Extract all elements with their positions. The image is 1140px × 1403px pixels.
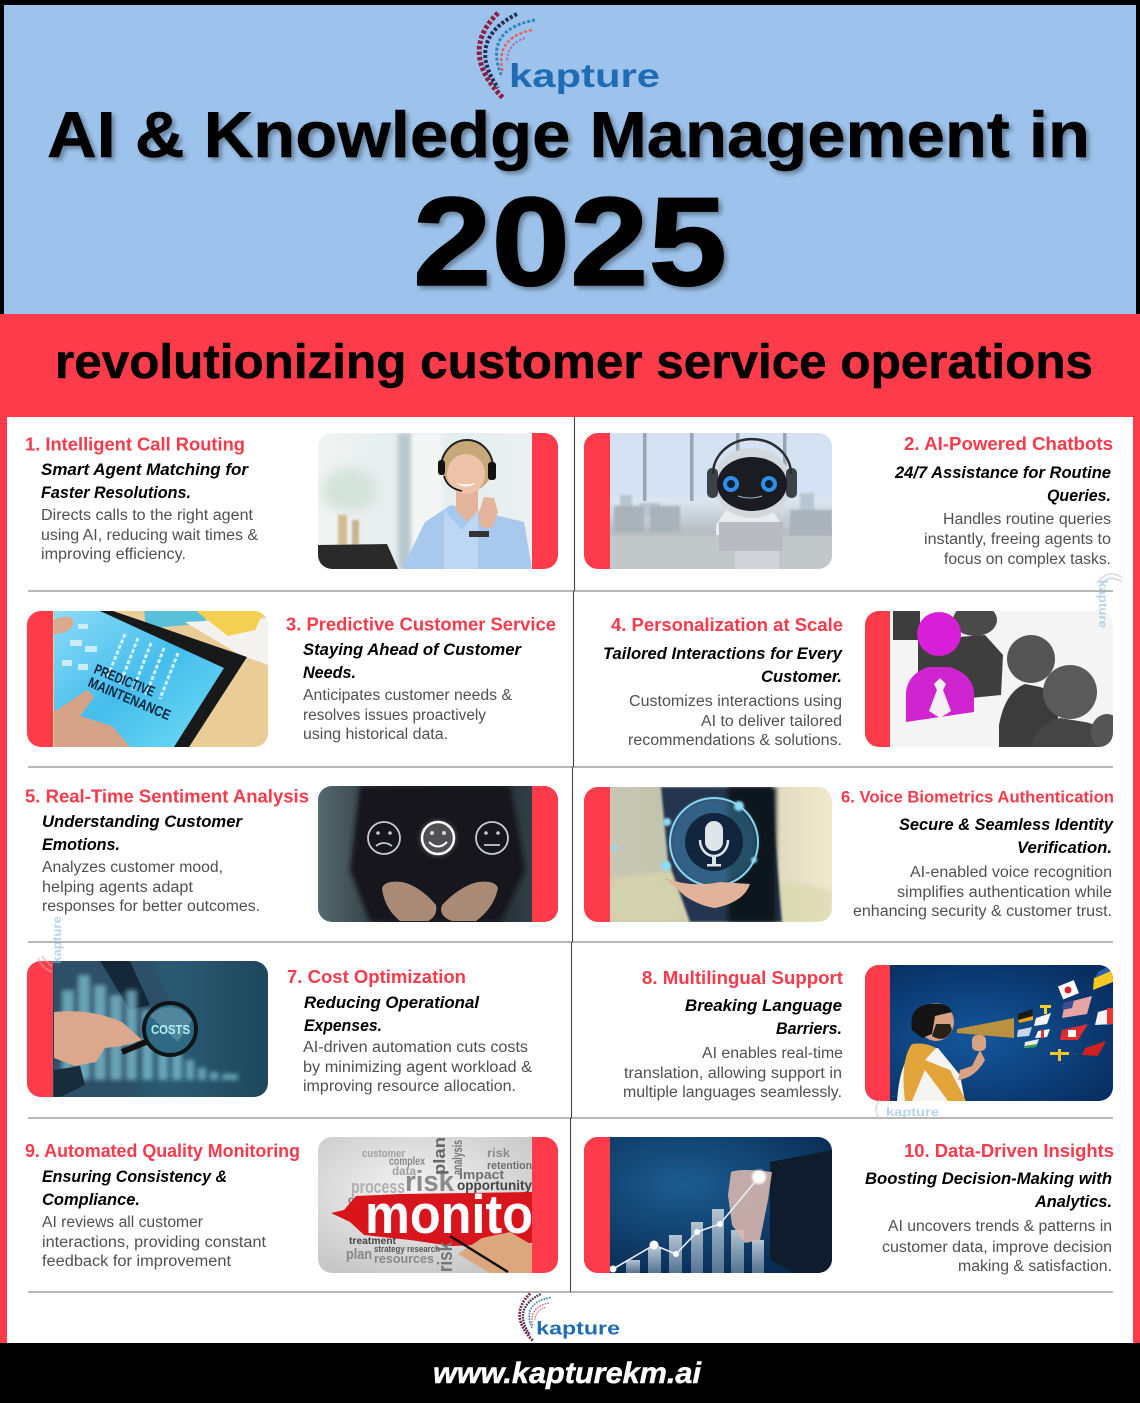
- body 3: using historical data.: [303, 726, 448, 743]
- image: magenta figure among grey figures: [865, 611, 1113, 747]
- panel 9: automated quality monitoring: [25, 1137, 558, 1273]
- subheading 6: Secure & Seamless Identity: [899, 816, 1114, 834]
- body 9: feedback for improvement: [42, 1253, 232, 1270]
- image: monitor word cloud: risk: [405, 1166, 455, 1198]
- body 7: by minimizing agent workload &: [303, 1059, 533, 1076]
- body 4: recommendations & solutions.: [628, 732, 842, 749]
- body 8: multiple languages seamlessly.: [623, 1084, 842, 1101]
- subheading 1: Smart Agent Matching for: [41, 461, 250, 479]
- image: rising bar chart with hand: [584, 1137, 832, 1273]
- body 3: [303, 687, 513, 743]
- heading 8: 8. Multilingual Support: [642, 967, 843, 988]
- footer band: [0, 1343, 1140, 1403]
- image: tablet with predictive maintenance: [27, 603, 268, 747]
- subheading 1: [41, 461, 250, 502]
- body 6: AI-enabled voice recognition: [910, 864, 1112, 881]
- body 5: Analyzes customer mood,: [42, 859, 223, 876]
- subheading 1: Faster Resolutions.: [41, 484, 191, 502]
- subheading 10: Boosting Decision-Making with: [865, 1170, 1112, 1188]
- image: voice microphone hologram: [584, 787, 832, 922]
- logo: kapture: kapture: [509, 57, 660, 94]
- subheading 7: [304, 994, 479, 1035]
- heading 6: 6. Voice Biometrics Authentication: [841, 788, 1114, 806]
- subheading 5: Understanding Customer: [42, 813, 244, 831]
- subheading 2: [894, 464, 1111, 505]
- body 8: [623, 1045, 843, 1101]
- image: call centre agent: [318, 433, 558, 569]
- image: monitor word cloud: cost: [348, 1193, 372, 1207]
- heading 3: 3. Predictive Customer Service: [286, 614, 556, 634]
- header panel: [0, 0, 1140, 314]
- body 9: [42, 1214, 267, 1270]
- body 8: translation, allowing support in: [624, 1065, 842, 1082]
- panel 3: predictive customer service: [27, 603, 556, 747]
- image: monitor word cloud: analysis: [449, 1140, 465, 1175]
- subheading 4: Customer.: [761, 668, 842, 686]
- year 2025: 2025: [413, 171, 727, 312]
- body 1: using AI, reducing wait times &: [41, 527, 259, 544]
- body 10: making & satisfaction.: [958, 1258, 1112, 1275]
- image: tablet with predictive maintenance: PREDICTIVE: [92, 662, 157, 701]
- body 2: focus on complex tasks.: [944, 551, 1111, 568]
- body 8: AI enables real-time: [702, 1045, 843, 1062]
- image: magnifier over costs chart: [27, 961, 268, 1097]
- body 7: improving resource allocation.: [303, 1078, 516, 1095]
- body 1: improving efficiency.: [41, 546, 186, 563]
- subheading 3: Staying Ahead of Customer: [303, 641, 523, 659]
- subheading 3: Needs.: [303, 664, 356, 682]
- footer logo: kapture: kapture: [536, 1318, 620, 1339]
- subheading 4: Tailored Interactions for Every: [603, 645, 843, 663]
- heading 9: 9. Automated Quality Monitoring: [25, 1140, 300, 1161]
- panel 10: data-driven insights: [584, 1137, 1114, 1275]
- subheading 2: Queries.: [1047, 487, 1111, 505]
- subheading 2: 24/7 Assistance for Routine: [894, 464, 1111, 482]
- subheading 7: Expenses.: [304, 1017, 382, 1035]
- panel 1: intelligent call routing: [25, 433, 558, 569]
- watermark: kapture bottom: kapture: [886, 1105, 939, 1119]
- subheading 3: [303, 641, 523, 682]
- title: AI & Knowledge Management in: [47, 98, 1090, 171]
- body 5: responses for better outcomes.: [42, 898, 260, 915]
- image: monitor word cloud: risk: [487, 1146, 510, 1160]
- subtitle: revolutionizing customer service operations: [55, 336, 1093, 389]
- subheading 10: [865, 1170, 1112, 1211]
- image: monitor word cloud: process: [351, 1177, 405, 1197]
- heading 2: 2. AI-Powered Chatbots: [904, 433, 1113, 454]
- image: monitor word cloud: resources: [374, 1251, 434, 1266]
- body 9: interactions, providing constant: [42, 1234, 267, 1251]
- body 7: AI-driven automation cuts costs: [303, 1039, 528, 1056]
- heading 5: 5. Real-Time Sentiment Analysis: [25, 786, 309, 806]
- body 1: [41, 507, 259, 563]
- heading 1: 1. Intelligent Call Routing: [25, 434, 245, 454]
- body 9: AI reviews all customer: [42, 1214, 203, 1231]
- watermark: kapture left: kapture: [52, 916, 64, 964]
- image: monitor word cloud: strategy research: [374, 1244, 440, 1254]
- watermark: kapture right: kapture: [1096, 580, 1108, 628]
- body 10: customer data, improve decision: [882, 1239, 1112, 1256]
- image: monitor word cloud: customer: [362, 1148, 406, 1160]
- body 4: [628, 693, 842, 749]
- panel 6: voice biometrics authentication: [584, 787, 1114, 922]
- image: monitor word cloud: data: [392, 1164, 416, 1178]
- panel 5: real-time sentiment analysis: [25, 786, 558, 922]
- subheading 8: [685, 997, 842, 1038]
- image: monitor word cloud: risk: [435, 1241, 457, 1272]
- subheading 8: Breaking Language: [685, 997, 842, 1015]
- heading 10: 10. Data-Driven Insights: [904, 1140, 1114, 1161]
- heading 7: 7. Cost Optimization: [287, 966, 466, 987]
- subheading 9: [42, 1168, 227, 1209]
- subheading 6: [899, 816, 1114, 857]
- image: monitor word cloud: complex: [389, 1154, 425, 1168]
- body 10: [882, 1218, 1112, 1275]
- footer logo: kapture: [520, 1294, 620, 1341]
- body 6: enhancing security & customer trust.: [853, 903, 1112, 920]
- body 2: Handles routine queries: [943, 511, 1111, 528]
- image: sentiment faces over hands: [318, 786, 558, 922]
- body 3: Anticipates customer needs &: [303, 687, 513, 704]
- subheading 5: [42, 813, 244, 854]
- image: monitor word cloud: impact: [459, 1167, 505, 1182]
- image: monitor word cloud: [318, 1137, 558, 1273]
- image: tablet with predictive maintenance: MAINTENANCE: [85, 675, 173, 724]
- subheading 6: Verification.: [1017, 839, 1112, 857]
- image: man with megaphone and flags: [865, 964, 1113, 1101]
- image: monitor word cloud: plan: [346, 1246, 372, 1263]
- panel 7: cost optimization: [27, 961, 533, 1097]
- body 2: instantly, freeing agents to: [924, 531, 1111, 548]
- heading 4: 4. Personalization at Scale: [611, 614, 843, 635]
- image: monitor word cloud: plan: [430, 1137, 449, 1175]
- body 1: Directs calls to the right agent: [41, 507, 254, 524]
- watermark: kapture left: [38, 916, 64, 972]
- image: robot with headset: [584, 433, 832, 569]
- red frame and subtitle band: [0, 314, 1140, 1343]
- image: monitor word cloud: treatment: [349, 1236, 397, 1247]
- body 5: [42, 859, 260, 915]
- subheading 9: Ensuring Consistency &: [42, 1168, 227, 1186]
- panel 4: personalization at scale: [603, 604, 1123, 750]
- body 6: simplifies authentication while: [897, 884, 1112, 901]
- logo: kapture: [479, 13, 660, 98]
- image: monitor word cloud: retention: [487, 1160, 532, 1172]
- subheading 9: Compliance.: [42, 1191, 140, 1209]
- watermark: kapture bottom: [876, 1100, 939, 1120]
- body 4: AI to deliver tailored: [701, 713, 842, 730]
- image: magnifier over costs chart: COSTS: [151, 1023, 190, 1037]
- panel 8: multilingual support: [623, 964, 1113, 1101]
- panel 2: AI-powered chatbots: [584, 433, 1113, 569]
- watermark: kapture right: [1096, 574, 1123, 628]
- subheading 10: Analytics.: [1034, 1193, 1112, 1211]
- image: monitor word cloud: opportunity: [457, 1177, 532, 1193]
- subheading 8: Barriers.: [776, 1020, 842, 1038]
- body 4: Customizes interactions using: [629, 693, 842, 710]
- website url: www.kapturekm.ai: [433, 1357, 702, 1390]
- subheading 5: Emotions.: [42, 836, 120, 854]
- body 6: [853, 864, 1112, 920]
- subheading 7: Reducing Operational: [304, 994, 479, 1012]
- image: monitor word cloud: monito: [365, 1183, 533, 1245]
- body 5: helping agents adapt: [42, 879, 194, 896]
- body 10: AI uncovers trends & patterns in: [888, 1218, 1112, 1235]
- body 3: resolves issues proactively: [303, 707, 486, 724]
- body 7: [303, 1039, 533, 1095]
- subheading 4: [603, 645, 843, 686]
- body 2: [924, 511, 1111, 568]
